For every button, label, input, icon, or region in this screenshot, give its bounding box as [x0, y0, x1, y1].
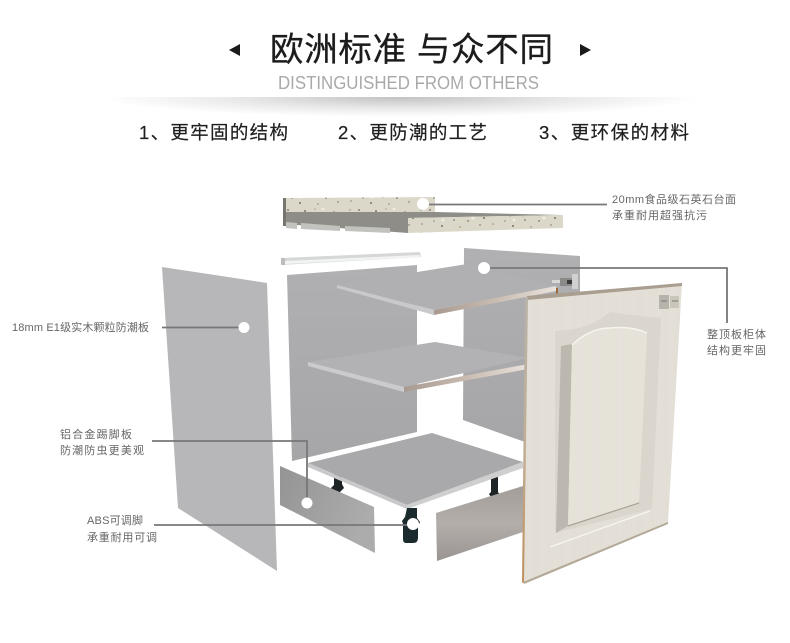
door left edge: [522, 297, 528, 583]
bottom shelf: [308, 433, 523, 509]
label line 2: 结构更牢固: [707, 343, 766, 357]
door top edge: [527, 283, 682, 300]
marker: [417, 198, 429, 210]
leader line: [484, 268, 727, 323]
kick plate left: [280, 466, 375, 553]
hinge: [552, 274, 578, 296]
label: 20mm食品级石英石台面: [612, 192, 736, 206]
marker: [302, 498, 312, 508]
callout: side board: [12, 320, 250, 334]
title text: 欧洲标准 与众不同: [270, 32, 553, 69]
feature 3: 3、更环保的材料: [539, 122, 689, 143]
left arrow: [229, 44, 240, 56]
label: 铝合金踢脚板: [60, 427, 132, 441]
label: 整顶板柜体: [707, 327, 766, 341]
cabinet legs: [331, 473, 500, 497]
door grain: [523, 283, 682, 582]
header shadow: [100, 97, 700, 137]
marker: [478, 262, 490, 274]
centre panel grain: [568, 328, 647, 526]
front adjustable leg: [402, 508, 420, 543]
top shelf: [337, 264, 556, 315]
subtitle: DISTINGUISHED FROM OTHERS: [278, 73, 539, 93]
door: [522, 283, 682, 584]
leader line: [423, 204, 607, 206]
label: ABS可调脚: [87, 513, 143, 527]
top rail: [281, 252, 421, 265]
callout: adjustable foot: [87, 513, 419, 544]
callout: top panel: [478, 262, 766, 357]
back right leg: [489, 474, 500, 497]
back panel right: [463, 248, 580, 442]
label line 2: 承重耐用超强抗污: [612, 208, 707, 222]
arch highlight: [572, 328, 647, 345]
panel bottom shadow: [568, 503, 639, 526]
marker: [407, 518, 419, 530]
marker: [238, 322, 250, 333]
door body: [523, 283, 682, 582]
back panel left: [287, 265, 417, 461]
kick plate right: [436, 486, 523, 561]
recessed panel: [555, 312, 661, 533]
leader line: [152, 441, 307, 503]
countertop: [283, 197, 563, 233]
side panel: [162, 267, 277, 571]
callout: countertop: [417, 192, 736, 222]
raised centre panel: [568, 328, 647, 526]
title: [229, 32, 591, 69]
feature 2: 2、更防潮的工艺: [338, 122, 487, 143]
feature 1: 1、更牢固的结构: [139, 122, 288, 143]
label: 18mm E1级实木颗粒防潮板: [12, 320, 149, 334]
middle shelf: [308, 342, 528, 392]
cabinet exploded view: [162, 197, 682, 584]
label line 2: 承重耐用可调: [87, 530, 157, 544]
door frame highlight: [550, 511, 650, 547]
back left leg: [331, 473, 344, 492]
door bottom edge: [523, 522, 668, 584]
leader line: [154, 524, 413, 526]
callout: kick plate: [60, 427, 312, 508]
feature list: [139, 122, 689, 143]
label line 2: 防潮防虫更美观: [60, 443, 144, 457]
door hinge plates: [659, 295, 679, 309]
recess left bevel: [556, 344, 572, 533]
leader line: [162, 326, 244, 328]
right arrow: [580, 44, 591, 56]
